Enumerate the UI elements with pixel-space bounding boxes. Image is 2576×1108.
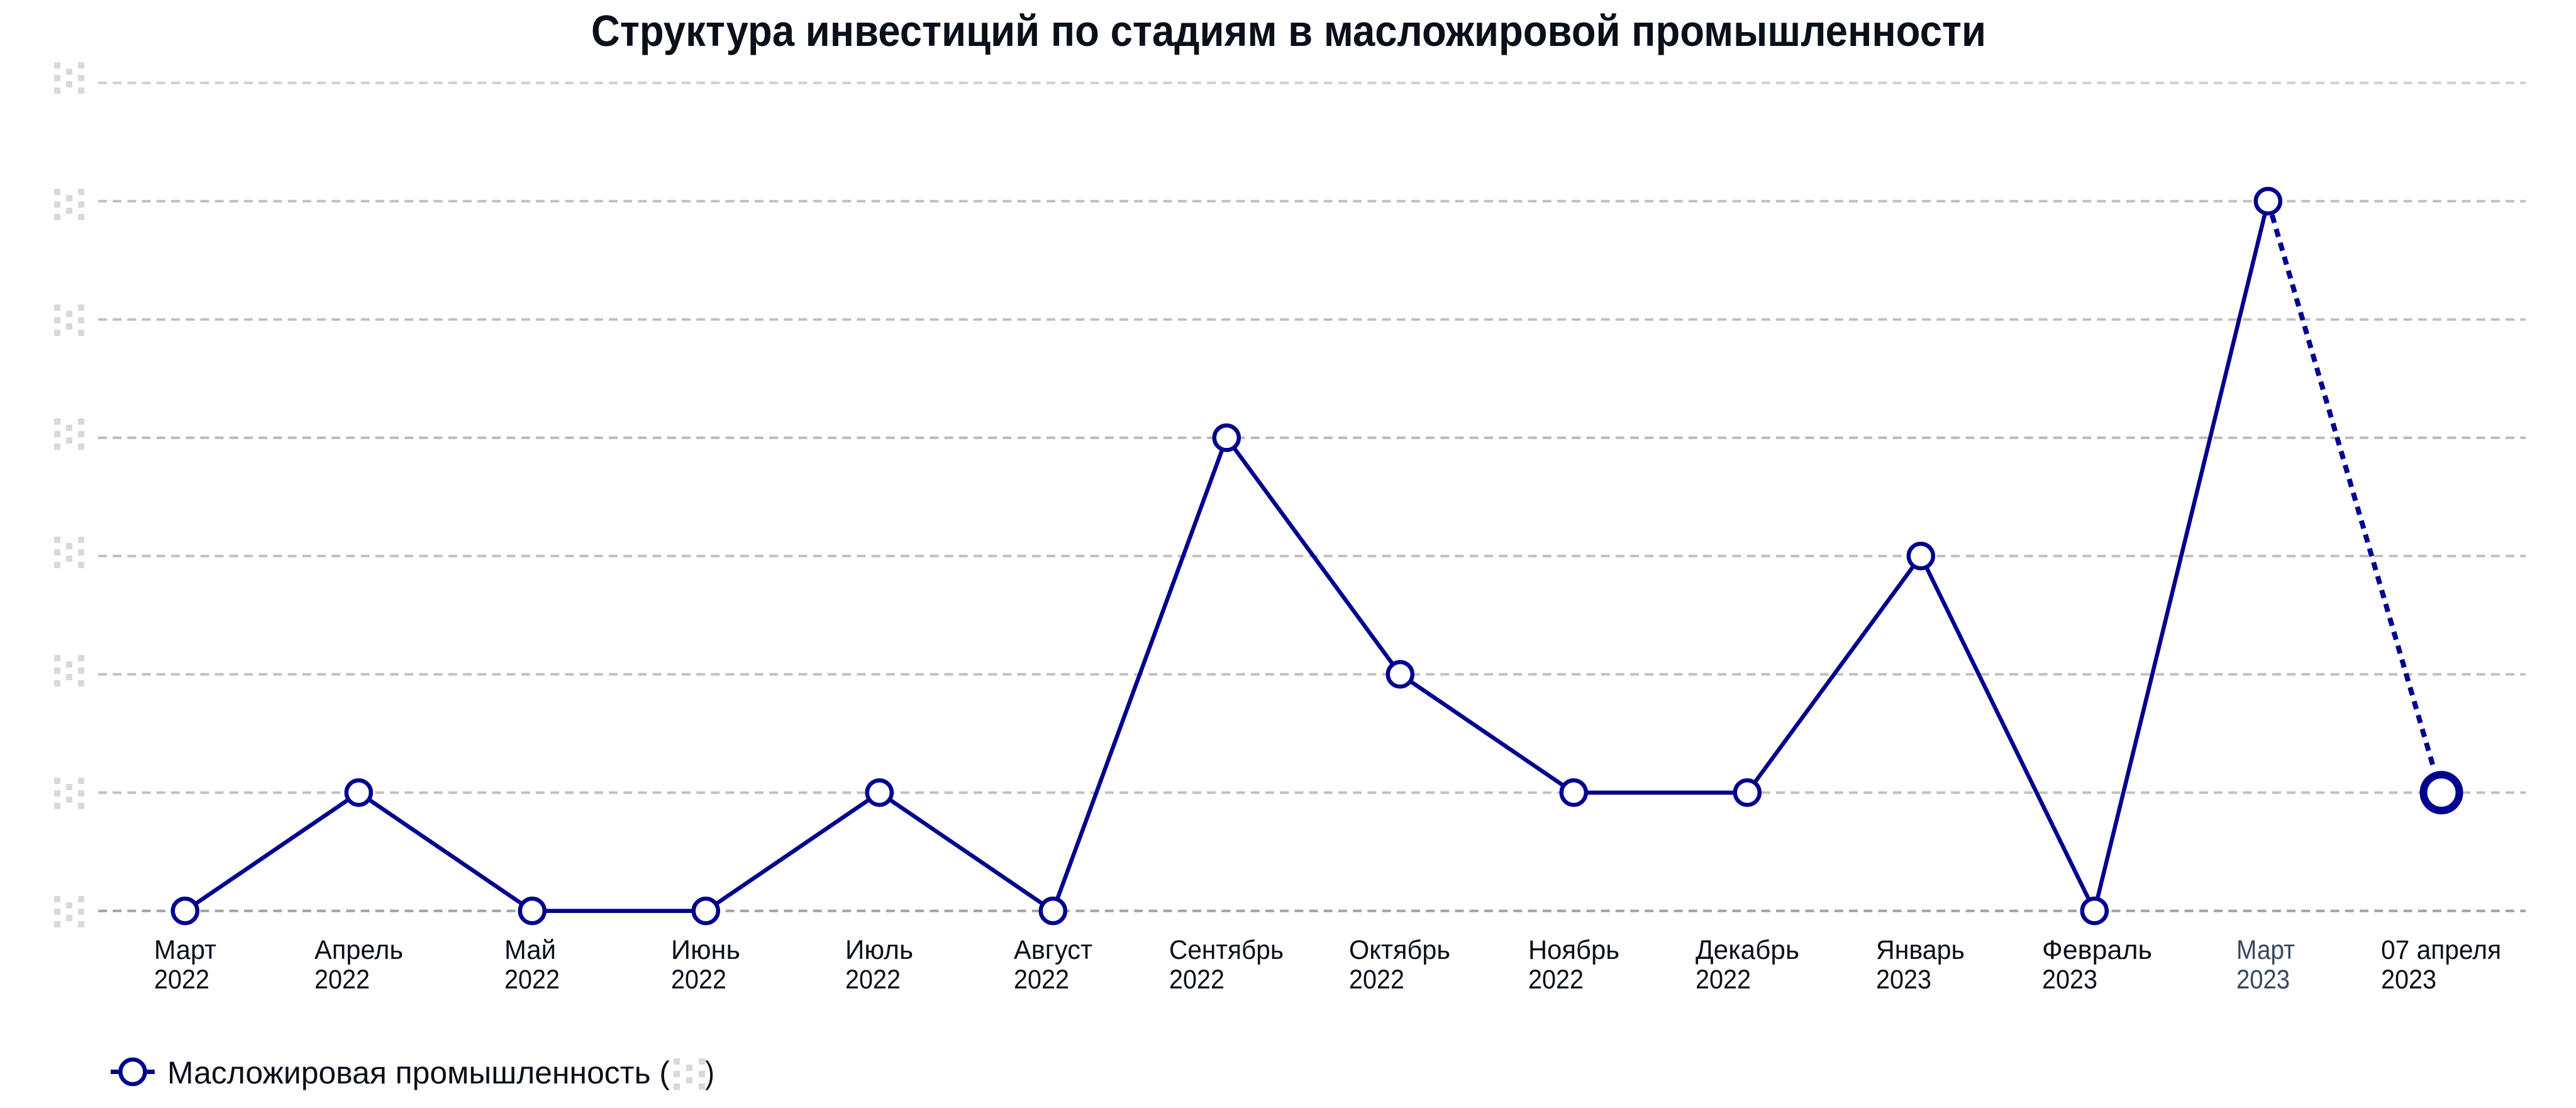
x axis labels: 2022 [314,965,370,995]
x axis labels: 2022 [671,965,726,995]
x axis labels: Сентябрь [1169,936,1284,965]
x axis labels: 2023 [1876,965,1931,995]
x axis labels: 2022 [1169,965,1224,995]
x axis labels: Март [2236,936,2295,965]
x axis labels: 2023 [2381,965,2436,995]
x axis labels: Май [504,936,556,965]
legend [111,1055,714,1090]
x axis labels: Январь [1876,936,1965,965]
x axis labels: 2022 [1014,965,1069,995]
x axis labels [154,936,2501,995]
legend closing bracket: ) [705,1055,714,1090]
x axis labels: 2022 [1349,965,1404,995]
x axis labels: 2022 [154,965,209,995]
x axis labels: 2022 [1696,965,1751,995]
legend label: Масложировая промышленность ( [167,1055,670,1090]
y axis: redacted tick labels [54,62,84,927]
data line: solid series [185,201,2268,911]
x axis labels: 2023 [2236,965,2290,995]
x axis labels: 2022 [845,965,901,995]
x axis labels: Июль [845,936,913,965]
x axis labels: 07 апреля [2381,936,2501,965]
x axis labels: Июнь [671,936,740,965]
data point markers [173,189,2459,923]
legend marker [111,1060,155,1084]
x axis labels: Февраль [2042,936,2152,965]
x axis labels: Август [1014,936,1092,965]
x axis labels: Декабрь [1696,936,1799,965]
x axis labels: 2022 [1528,965,1584,995]
x axis labels: 2022 [504,965,560,995]
title: Структура инвестиций по стадиям в масложировой промышленности [591,6,1986,55]
x axis labels: Апрель [314,936,403,965]
x axis labels: Ноябрь [1528,936,1619,965]
x axis labels: Октябрь [1349,936,1450,965]
data line: dotted forecast segment [2268,201,2434,769]
x axis labels: Март [154,936,216,965]
legend redacted value [674,1058,705,1090]
x axis labels: 2023 [2042,965,2097,995]
